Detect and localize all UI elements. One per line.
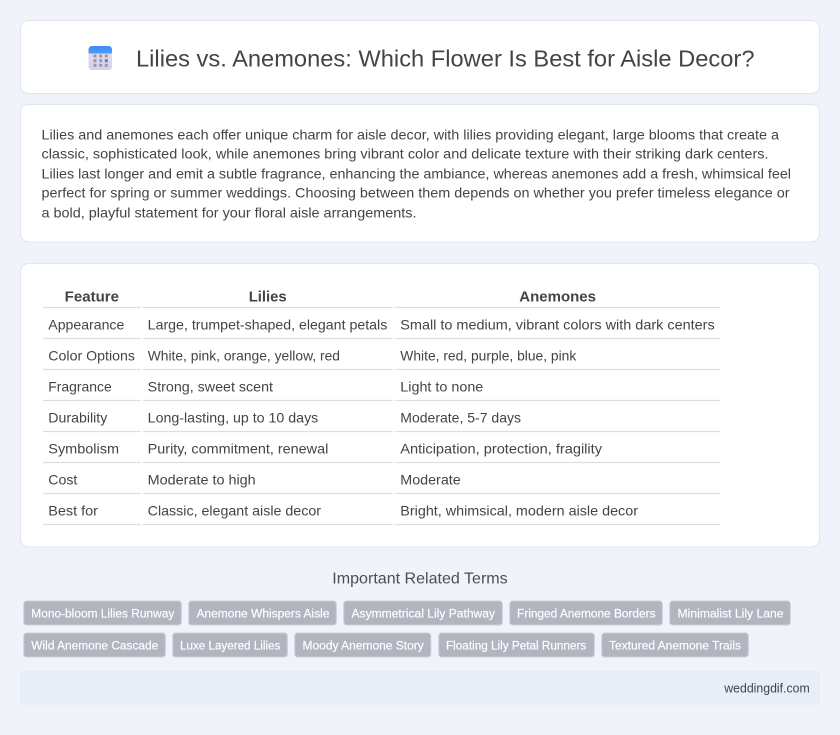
row: symbolism: Symbolism	[48, 440, 119, 456]
tag: Minimalist Lily Lane	[678, 606, 784, 620]
tag: Floating Lily Petal Runners	[446, 638, 586, 652]
panel: header	[20, 20, 820, 94]
table header row	[65, 289, 596, 306]
row: cost	[48, 471, 461, 487]
row: durability	[48, 409, 521, 425]
row: fragrance: Fragrance	[48, 378, 112, 394]
table header row: Feature	[65, 289, 119, 306]
title: Lilies vs. Anemones: Which Flower Is Best for Aisle Decor?	[136, 46, 754, 72]
row: cost: Moderate	[400, 471, 461, 487]
footer credit: weddingdif.com	[723, 681, 810, 695]
row: best for: Bright, whimsical, modern aisle decor	[400, 502, 638, 518]
tag: Asymmetrical Lily Pathway	[352, 606, 496, 620]
row: appearance: Large, trumpet-shaped, elegant petals	[148, 316, 387, 332]
row: appearance: Small to medium, vibrant colors with dark centers	[400, 316, 715, 332]
icon: calendar	[88, 46, 112, 70]
table rules	[43, 308, 720, 524]
tags: related terms	[24, 601, 790, 657]
row: durability: Long-lasting, up to 10 days	[148, 409, 318, 425]
table header row: Lilies	[249, 289, 287, 306]
tag: Moody Anemone Story	[302, 638, 425, 652]
row: cost: Moderate to high	[148, 471, 256, 487]
tag	[24, 633, 165, 657]
row: fragrance: Light to none	[400, 378, 484, 394]
tag	[24, 601, 181, 625]
summary text: perfect for spring or summer weddings. Choosing between them depends on whether you prefer timeless elegance or	[42, 185, 790, 201]
summary text: a bold, playful statement for your floral aisle arrangements.	[42, 204, 417, 220]
row: symbolism	[48, 440, 602, 456]
row: fragrance: Strong, sweet scent	[148, 378, 273, 394]
tag	[189, 601, 336, 625]
row: best for: Best for	[48, 502, 98, 518]
row: appearance	[48, 316, 715, 332]
tag	[670, 601, 790, 625]
summary text: classic, sophisticated look, while anemones bring vibrant color and delicate texture with their striking dark centers.	[42, 146, 769, 162]
row: best for: Classic, elegant aisle decor	[148, 502, 321, 518]
tag	[439, 633, 594, 657]
tag: Wild Anemone Cascade	[31, 638, 158, 652]
row: symbolism: Anticipation, protection, fragility	[400, 440, 602, 456]
tag	[295, 633, 431, 657]
tag	[602, 633, 748, 657]
row: color options	[48, 347, 577, 363]
row: color options: Color Options	[48, 347, 135, 363]
row: appearance: Appearance	[48, 316, 125, 332]
tag: Luxe Layered Lilies	[180, 638, 280, 652]
row: fragrance	[48, 378, 484, 394]
summary text: Lilies last longer and emit a subtle fragrance, enhancing the ambiance, whereas anemones add a fresh, whimsical feel	[42, 165, 791, 181]
row: color options: White, red, purple, blue, pink	[400, 347, 577, 363]
tag	[344, 601, 502, 625]
row: best for	[48, 502, 638, 518]
panel: summary paragraph	[20, 104, 820, 242]
row: durability: Moderate, 5-7 days	[400, 409, 521, 425]
tag: Mono-bloom Lilies Runway	[31, 606, 175, 620]
row: symbolism: Purity, commitment, renewal	[148, 440, 328, 456]
row: color options: White, pink, orange, yellow, red	[148, 347, 340, 363]
footer bar	[20, 671, 820, 705]
tag	[173, 633, 287, 657]
tag: Anemone Whispers Aisle	[196, 606, 330, 620]
table header row: Anemones	[519, 289, 596, 306]
summary text: Lilies and anemones each offer unique charm for aisle decor, with lilies providing elegant, large blooms that create a	[42, 126, 779, 142]
heading: important related terms: Important Related Terms	[332, 570, 508, 587]
summary text	[42, 126, 791, 220]
tag: Textured Anemone Trails	[609, 638, 741, 652]
panel: comparison table	[20, 264, 820, 547]
row: cost: Cost	[48, 471, 77, 487]
tag: Fringed Anemone Borders	[517, 606, 656, 620]
row: durability: Durability	[48, 409, 107, 425]
tag	[510, 601, 662, 625]
